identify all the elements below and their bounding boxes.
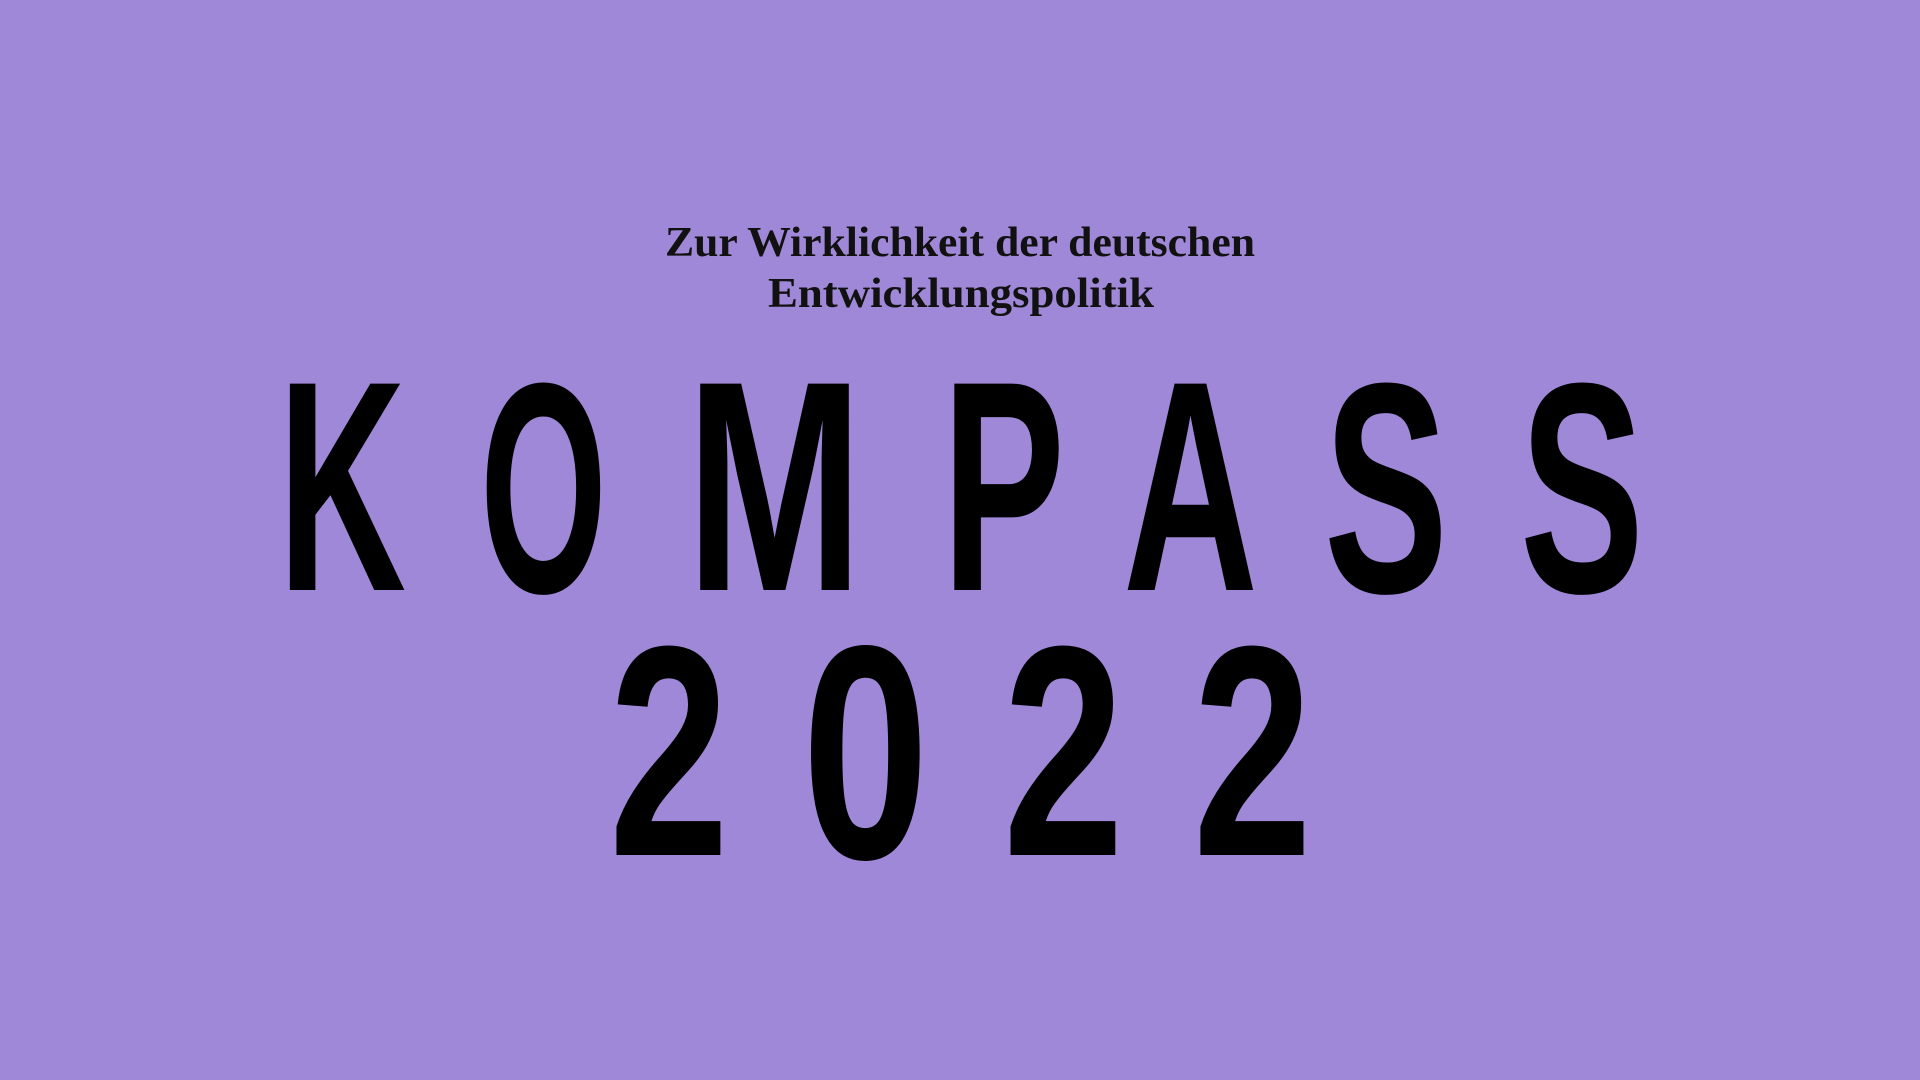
title: year 2022 [609,582,1312,923]
subtitle: Zur Wirklichkeit der deutschen [665,220,1255,266]
title: KOMPASS: K [278,318,406,654]
title: KOMPASS: A [1123,318,1258,654]
title: KOMPASS [278,318,1644,656]
subtitle: Entwicklungspolitik [768,271,1155,317]
title: KOMPASS: P [942,318,1065,654]
title: year 2022: 2 [609,583,729,919]
title: year 2022: 2 [1003,583,1124,919]
title: KOMPASS: S [1520,320,1644,656]
title: KOMPASS: O [480,320,607,656]
subtitle [665,220,1255,317]
title: year 2022: 0 [802,582,929,923]
title: KOMPASS: S [1324,320,1448,656]
title: year 2022: 2 [1193,583,1312,919]
title: KOMPASS: M [686,318,863,654]
